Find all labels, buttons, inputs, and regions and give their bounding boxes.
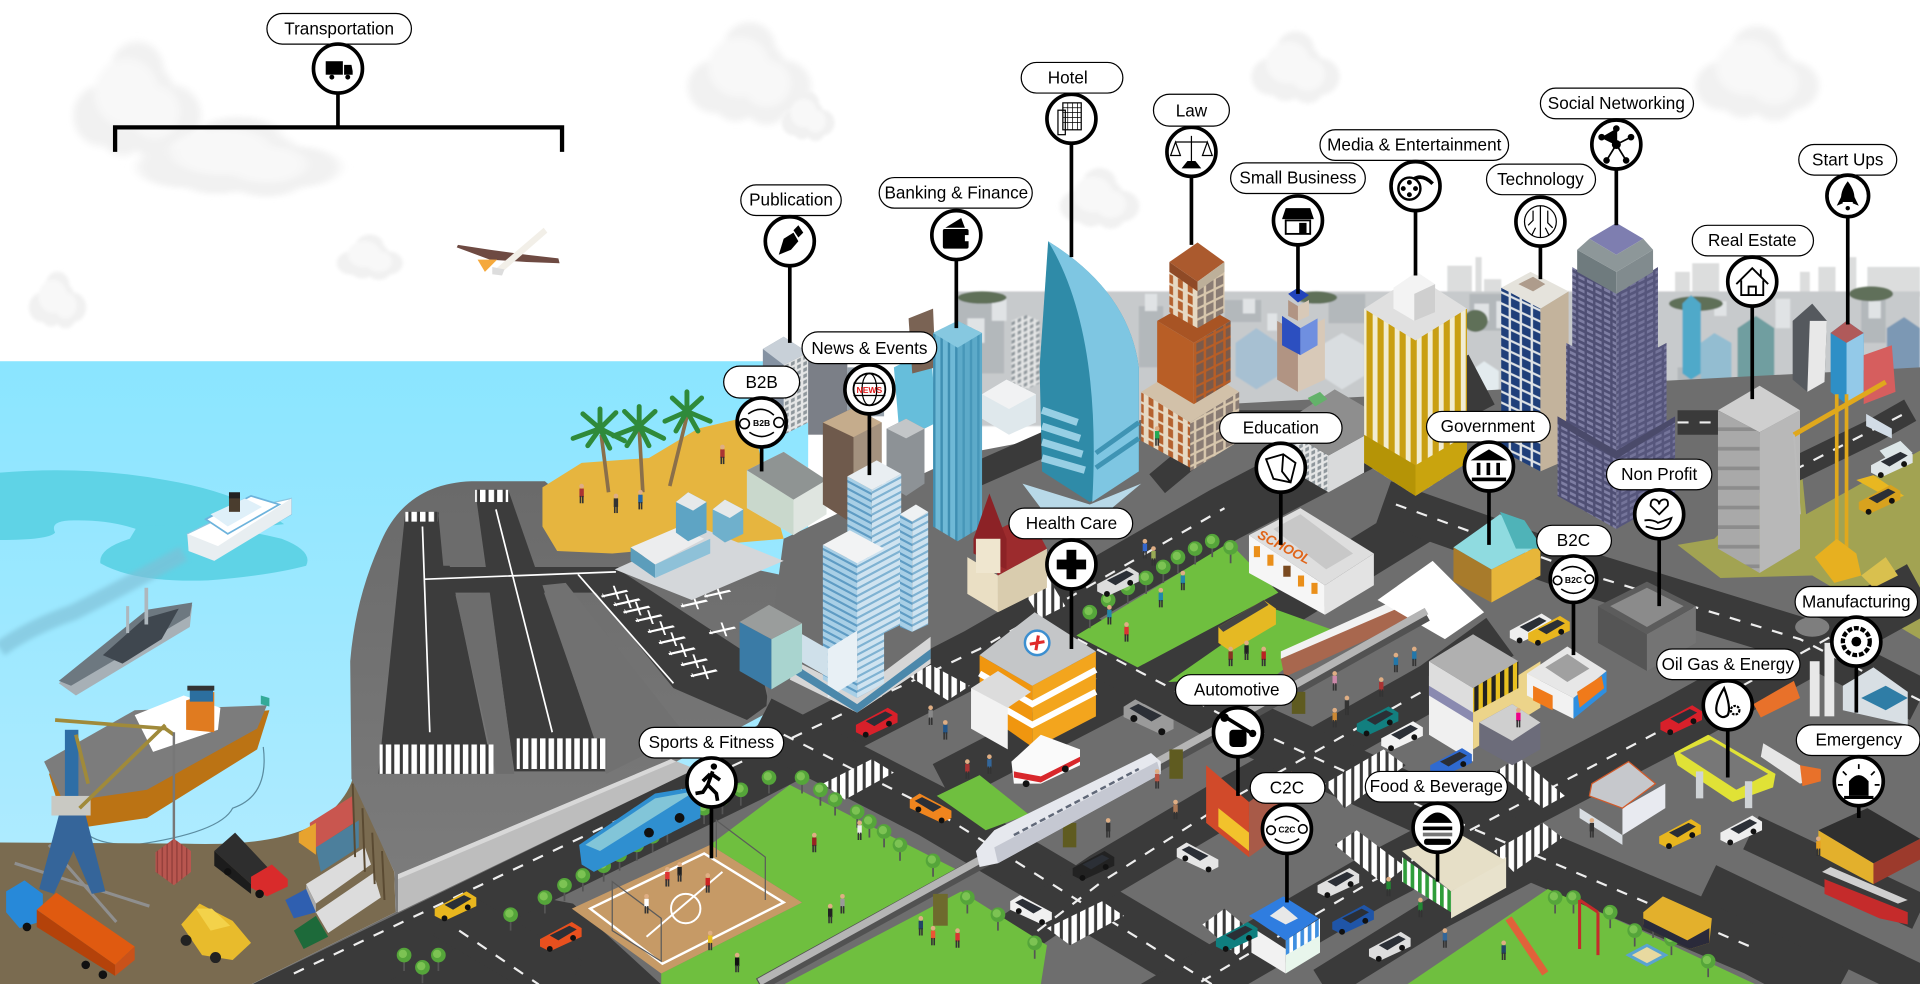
icon: news globe [853, 373, 885, 405]
media tower [1364, 272, 1467, 496]
sea [0, 361, 808, 851]
icon: burger [1423, 812, 1452, 845]
distant skyline [1447, 257, 1920, 296]
blue glass towers [790, 460, 931, 713]
icon: pen nib [779, 225, 803, 255]
fire station [1818, 808, 1920, 884]
non profit building [1598, 582, 1696, 671]
fire truck [1822, 867, 1908, 924]
icon: storefront [1282, 208, 1314, 234]
small white block beside banking [982, 380, 1036, 435]
school [1249, 508, 1374, 615]
icon: heart in hand [1644, 499, 1671, 529]
gas station [1674, 735, 1776, 808]
icon: open book [1266, 454, 1296, 482]
tall background blocks near publication [763, 309, 937, 441]
icon: rocket [1837, 181, 1859, 210]
pin: Small Business: Small Business [1239, 168, 1356, 188]
icon: scales [1171, 136, 1212, 168]
pin: Real Estate [1692, 225, 1813, 399]
B2C shop [1527, 647, 1607, 719]
playground [1509, 900, 1665, 973]
icon: circuit [1524, 206, 1556, 238]
airplane in flight [457, 228, 560, 276]
airport terminal [615, 492, 784, 600]
law tower [1141, 242, 1239, 471]
pin: Education: Education [1243, 417, 1319, 437]
factory [1795, 617, 1908, 725]
pin: Start Ups: Start Ups [1812, 149, 1883, 169]
icon: news globe: NEWS [857, 385, 883, 395]
pin: Publication [741, 185, 841, 343]
building: news tower group [823, 408, 924, 524]
icon: house [1736, 268, 1768, 295]
pedestrian bridge and steps [1281, 561, 1484, 677]
pin: Government [1427, 411, 1550, 545]
oil tanker [1753, 681, 1821, 786]
icon: bank [1471, 449, 1507, 481]
pin: B2C: B2C [1557, 530, 1590, 550]
mall with stripes [1429, 634, 1540, 765]
road markings [294, 414, 1920, 984]
yellow school bus lower right [1643, 896, 1712, 949]
church [967, 493, 1047, 612]
start ups tower and neighbours [1793, 304, 1896, 404]
real estate concrete block [1718, 386, 1800, 573]
people [579, 426, 1821, 972]
cars [435, 448, 1913, 962]
seawall [398, 759, 696, 912]
pin: Small Business [1231, 163, 1365, 294]
pin: Government: Government [1441, 416, 1535, 436]
pin: Banking & Finance: Banking & Finance [884, 182, 1028, 202]
port crane [15, 720, 191, 922]
intercity bus [579, 786, 700, 872]
cruise ship [187, 492, 291, 561]
pin: C2C [1250, 773, 1325, 902]
pin: Automotive [1176, 675, 1297, 796]
pin: Hotel [1021, 62, 1123, 257]
pin: Automotive: Automotive [1194, 680, 1280, 700]
pin: Non Profit [1607, 459, 1712, 606]
teal small building [740, 605, 802, 689]
icon: gear [1843, 628, 1870, 655]
convenience store [1580, 762, 1665, 845]
automotive shop [1206, 765, 1292, 857]
technology tower [1501, 272, 1569, 471]
cargo ship [44, 686, 269, 845]
pin: B2B [724, 366, 800, 471]
icon: wrench fist [1220, 713, 1256, 747]
school: SCHOOL [1255, 527, 1313, 567]
road network [251, 380, 1920, 984]
pin: Start Ups [1799, 144, 1897, 324]
port fence posts [353, 784, 384, 900]
trucks at the port [6, 833, 381, 979]
elevated rail [759, 611, 1427, 984]
building: B2B office [747, 452, 827, 535]
pin: Technology [1487, 164, 1596, 279]
icon: film reel [1398, 177, 1433, 200]
building: banking tower [933, 321, 982, 541]
ship wake [0, 553, 184, 649]
icon: medical cross [1057, 550, 1086, 579]
education wing behind government [1278, 389, 1364, 492]
palm trees [573, 392, 710, 492]
pin: News & Events [802, 332, 937, 475]
icon: B2C exchange: B2C [1565, 575, 1582, 585]
pin: Oil Gas & Energy [1657, 649, 1800, 778]
pin: Transportation bracket: Transportation [284, 18, 394, 38]
pin: Food & Beverage [1365, 771, 1507, 882]
pin: Transportation bracket [115, 13, 562, 152]
pin: Manufacturing [1795, 587, 1918, 713]
pin: Oil Gas & Energy: Oil Gas & Energy [1662, 654, 1794, 674]
navy ship [59, 588, 192, 696]
port ground [0, 779, 396, 984]
icon: network [1599, 126, 1633, 163]
distant city [955, 287, 1920, 426]
pin: Social Networking [1540, 88, 1693, 225]
school bus [1218, 600, 1276, 651]
parked planes [601, 586, 736, 679]
pin: News & Events: News & Events [811, 338, 927, 358]
icon: oil drop and gear [1716, 688, 1739, 717]
tree rows [397, 534, 1716, 983]
pin: Law [1153, 94, 1229, 245]
sandy beach [542, 416, 784, 553]
pin: Media & Entertainment: Media & Entertainment [1327, 135, 1502, 155]
ambulance [1011, 735, 1080, 787]
pin: Media & Entertainment [1320, 130, 1509, 276]
pin: Health Care [1009, 508, 1133, 649]
darker water patches [0, 470, 308, 581]
pin: Education [1220, 413, 1342, 545]
hotel tower [1022, 241, 1141, 527]
stacked containers [299, 796, 359, 872]
basketball court [572, 820, 802, 973]
pin: C2C: C2C [1270, 777, 1304, 797]
pin: B2C [1537, 525, 1611, 655]
icon: hotel building [1058, 103, 1081, 135]
runways [378, 490, 769, 774]
airport ground [350, 481, 784, 912]
construction crane [1794, 382, 1913, 588]
pin: Emergency: Emergency [1815, 730, 1903, 750]
icon: wallet [943, 218, 971, 249]
high speed train [976, 753, 1161, 867]
pin: Sports & Fitness: Sports & Fitness [649, 732, 774, 752]
pin: Law: Law [1176, 100, 1208, 120]
food shop [1402, 833, 1506, 918]
olive construction ground [1678, 451, 1920, 639]
icon: B2B exchange: B2B [753, 418, 770, 428]
green parks [661, 542, 1756, 984]
pin: B2B: B2B [745, 372, 778, 392]
city ground [251, 367, 1920, 984]
social networking tower [1558, 223, 1675, 529]
pin: Non Profit: Non Profit [1621, 464, 1697, 484]
pin: Social Networking: Social Networking [1548, 93, 1685, 113]
C2C kiosk [1249, 896, 1320, 973]
hospital [971, 612, 1096, 749]
small business tower [1277, 288, 1325, 392]
pin: Publication: Publication [749, 190, 833, 210]
icon: truck [326, 61, 353, 80]
pin: Manufacturing: Manufacturing [1802, 591, 1911, 611]
pin: Food & Beverage: Food & Beverage [1370, 776, 1503, 796]
pin: Emergency [1796, 725, 1920, 818]
pin: Banking & Finance [879, 178, 1032, 328]
icon: C2C exchange: C2C [1278, 825, 1296, 835]
clouds [29, 22, 1819, 328]
pin: Health Care: Health Care [1026, 513, 1117, 533]
government teal building [1453, 512, 1543, 602]
pin: Sports & Fitness [639, 727, 784, 858]
pin: Technology: Technology [1497, 169, 1584, 189]
icon: runner [696, 763, 720, 801]
pin: Real Estate: Real Estate [1708, 230, 1797, 250]
pin: Hotel: Hotel [1048, 67, 1088, 87]
crosswalks [823, 576, 1565, 955]
icon: siren [1838, 764, 1880, 799]
